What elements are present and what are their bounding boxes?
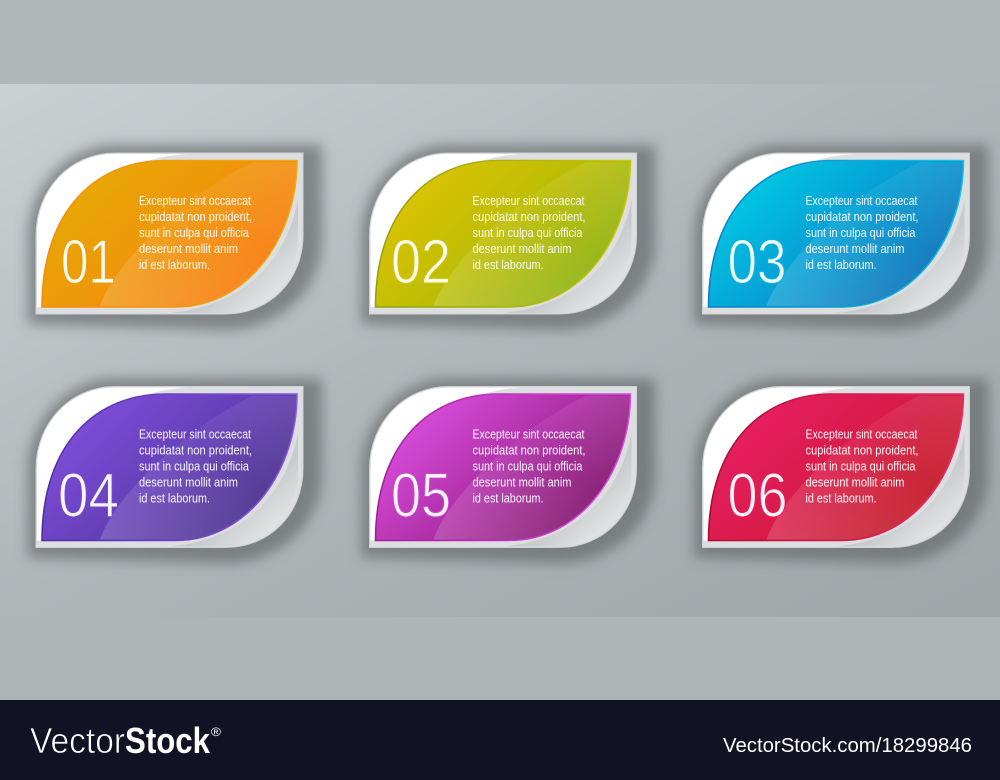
gloss 01 [100, 162, 296, 306]
text block 02 [472, 193, 586, 272]
text block 02: id est laborum. [472, 257, 544, 272]
text block 06: id est laborum. [806, 490, 876, 506]
leaf 05 [376, 394, 630, 540]
text block 06: cupidatat non proident, [806, 442, 918, 458]
gloss 06 [766, 396, 962, 540]
leaf 06 [708, 394, 964, 540]
text block 01: id est laborum. [139, 257, 210, 272]
text block 03: sunt in culpa qui officia [806, 225, 916, 240]
card 05 [362, 378, 656, 564]
card 02 [362, 145, 656, 330]
text block 06: sunt in culpa qui officia [806, 458, 916, 474]
text block 03: id est laborum. [806, 257, 876, 272]
gloss 02 [434, 162, 630, 306]
text block 04: sunt in culpa qui officia [139, 458, 250, 474]
text block 03: deserunt mollit anim [806, 241, 904, 256]
text block 05: id est laborum. [472, 490, 544, 506]
footer logo: Stock [125, 720, 211, 761]
footer logo [30, 720, 221, 761]
text block 03 [806, 193, 918, 272]
gloss 05 [434, 396, 630, 540]
number 04: 04 [58, 462, 119, 530]
footer logo: Vector [30, 720, 125, 761]
text block 06: Excepteur sint occaecat [806, 426, 918, 442]
text block 02: cupidatat non proident, [472, 209, 586, 224]
text block 04: Excepteur sint occaecat [139, 426, 251, 442]
background: lower band [0, 617, 1000, 700]
text block 02: Excepteur sint occaecat [472, 193, 585, 208]
leaf 01 [42, 160, 297, 307]
text block 05: Excepteur sint occaecat [472, 426, 585, 442]
text block 04: deserunt mollit anim [139, 474, 238, 490]
text block 02: deserunt mollit anim [472, 241, 572, 256]
text block 03: cupidatat non proident, [806, 209, 918, 224]
text block 05 [472, 426, 586, 506]
footer image id: VectorStock.com/18299846 [723, 735, 972, 757]
text block 01: Excepteur sint occaecat [139, 193, 251, 208]
gloss 03 [766, 162, 962, 306]
text block 06 [806, 426, 918, 506]
leaf 04 [42, 394, 297, 540]
text block 01: cupidatat non proident, [139, 209, 252, 224]
text block 01: deserunt mollit anim [139, 241, 238, 256]
text block 05: sunt in culpa qui officia [472, 458, 583, 474]
number 06: 06 [728, 462, 788, 530]
background: top band [0, 0, 1000, 84]
text block 05: cupidatat non proident, [472, 442, 586, 458]
gloss 04 [100, 396, 296, 540]
text block 04: cupidatat non proident, [139, 442, 252, 458]
card 03 [694, 145, 988, 330]
text block 05: deserunt mollit anim [472, 474, 572, 490]
number 03: 03 [728, 228, 786, 297]
text block 03: Excepteur sint occaecat [806, 193, 918, 208]
text block 04 [139, 426, 252, 506]
footer bar [0, 700, 1000, 780]
text block 01: sunt in culpa qui officia [139, 225, 250, 240]
leaf 02 [376, 160, 630, 307]
footer logo: ® [211, 725, 221, 739]
text block 06: deserunt mollit anim [806, 474, 904, 490]
card 04 [28, 378, 322, 564]
text block 04: id est laborum. [139, 490, 210, 506]
number 01: 01 [61, 228, 116, 297]
text block 01 [139, 193, 252, 272]
text block 02: sunt in culpa qui officia [472, 225, 583, 240]
number 02: 02 [391, 228, 451, 297]
background: main panel [0, 84, 1000, 617]
leaf 03 [708, 160, 964, 307]
card 01 [28, 145, 322, 330]
number 05: 05 [391, 462, 451, 530]
card 06 [694, 378, 988, 564]
